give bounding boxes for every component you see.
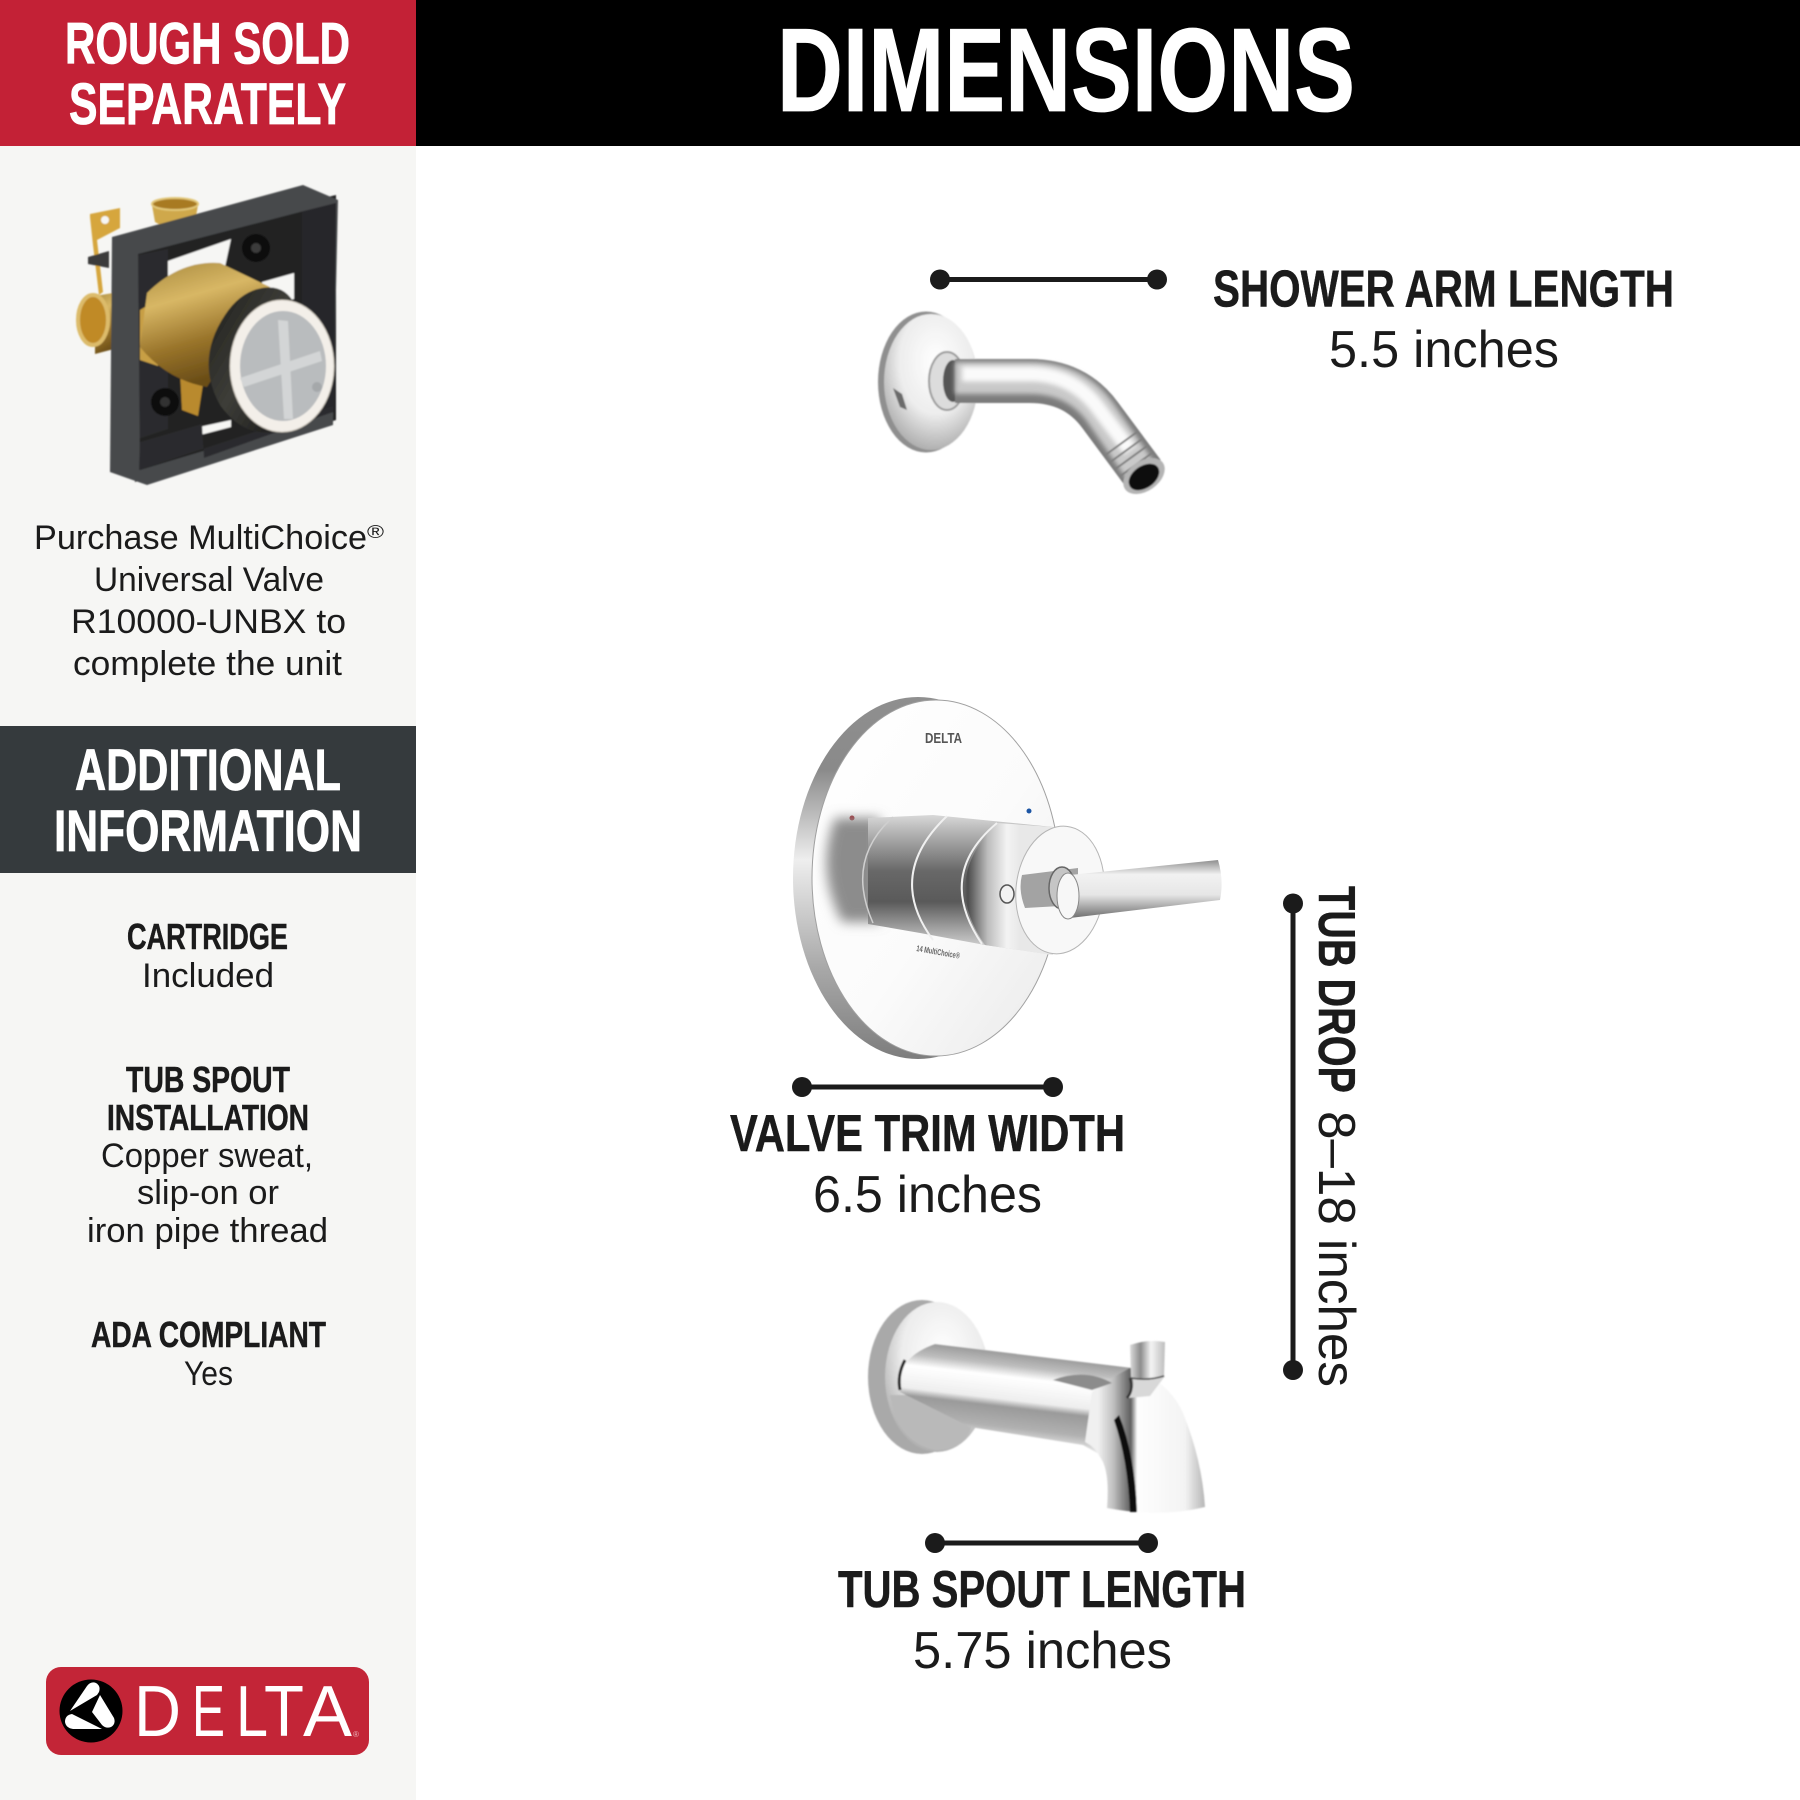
text block: tub spout length bbox=[838, 1561, 1246, 1680]
diverter neck bbox=[1128, 1376, 1165, 1398]
icon: rough-in valve bbox=[78, 185, 338, 485]
text block: valve trim width: 6.5 inches bbox=[813, 1166, 1042, 1224]
plastic cap cross bbox=[240, 320, 322, 419]
text block: tub spout installation bbox=[87, 1059, 328, 1250]
frame lower inner wall bbox=[139, 406, 333, 470]
panel: sidebar background bbox=[0, 146, 416, 1800]
text block: valve trim width bbox=[730, 1105, 1125, 1224]
lever bbox=[1070, 860, 1222, 918]
text block: ada compliant: ADA COMPLIANT bbox=[91, 1314, 326, 1355]
text block: tub drop: 8–18 inches bbox=[1307, 1111, 1365, 1387]
segment line 2 bbox=[912, 816, 947, 940]
front flange bbox=[885, 1302, 989, 1452]
multichoice mark: 14 MultiChoice® bbox=[916, 943, 961, 961]
top brass fitting bbox=[152, 200, 198, 258]
threaded outlet bbox=[180, 372, 204, 416]
threads bbox=[1104, 432, 1157, 484]
back flange bbox=[793, 697, 1043, 1059]
lever tip bbox=[1057, 873, 1079, 919]
last segment shading bbox=[965, 823, 1053, 955]
title: dimensions banner: DIMENSIONS bbox=[777, 4, 1355, 137]
icon: shower arm bbox=[878, 312, 1171, 501]
logo: delta: ® bbox=[353, 1730, 359, 1739]
cap nub bbox=[312, 382, 322, 392]
logo: delta: E bbox=[192, 1672, 225, 1752]
text block: cartridge bbox=[127, 916, 288, 995]
heading: additional information: INFORMATION bbox=[54, 799, 362, 864]
left inner wall bbox=[138, 249, 168, 439]
plastic cap bbox=[240, 311, 326, 421]
icon: tub spout bbox=[868, 1300, 1205, 1513]
text block: purchase note: ® bbox=[367, 522, 384, 542]
brass valve body bbox=[140, 263, 270, 387]
text block: purchase note: R10000-UNBX to bbox=[71, 603, 346, 641]
right window bbox=[262, 273, 294, 307]
panel: rough sold separately banner: SEPARATELY bbox=[69, 72, 346, 137]
text block: tub spout installation: iron pipe thread bbox=[87, 1212, 328, 1250]
text block: tub spout installation: TUB SPOUT bbox=[126, 1059, 290, 1100]
logo: delta bbox=[46, 1667, 369, 1755]
text block: ada compliant bbox=[91, 1314, 326, 1393]
logo: delta: A bbox=[303, 1672, 352, 1752]
inner dark back of frame bbox=[125, 195, 336, 482]
lever hub bbox=[1021, 868, 1078, 908]
spout pipe bbox=[899, 1344, 1135, 1460]
flange back bbox=[878, 312, 974, 452]
spout tip bbox=[1085, 1368, 1205, 1513]
tab clip bbox=[88, 251, 109, 268]
dark reflection stripe bbox=[1114, 1415, 1137, 1512]
flange face bbox=[884, 314, 978, 450]
text block: shower arm length bbox=[1213, 260, 1674, 379]
icon: valve trim bbox=[793, 697, 1222, 1059]
small button bbox=[1000, 885, 1014, 903]
title: dimensions banner bbox=[416, 0, 1800, 146]
pipe opening bbox=[1117, 451, 1171, 501]
text block: tub drop: TUB DROP bbox=[1307, 886, 1365, 1093]
end cap bbox=[1010, 822, 1110, 958]
diverter seam bbox=[1131, 1376, 1164, 1379]
text block: cartridge: Included bbox=[142, 957, 274, 995]
arrow: valve trim dimension line bbox=[792, 1077, 1063, 1097]
lower window bbox=[181, 420, 231, 440]
heading: additional information bbox=[0, 726, 416, 873]
arm mid tone bbox=[955, 378, 1140, 470]
text block: purchase note: complete the unit bbox=[73, 645, 343, 683]
segment line 3 bbox=[962, 823, 997, 944]
cartridge chrome ring bbox=[230, 300, 334, 432]
text block: ada compliant: Yes bbox=[184, 1355, 233, 1393]
text block: tub drop bbox=[1307, 886, 1365, 1387]
text block: tub spout installation: slip-on or bbox=[137, 1174, 279, 1212]
arrow: tub drop dimension line bbox=[1283, 894, 1303, 1380]
flange dark crease bbox=[899, 1360, 905, 1390]
text block: cartridge: CARTRIDGE bbox=[127, 916, 288, 957]
text block: tub spout length: 5.75 inches bbox=[913, 1622, 1172, 1680]
frame right inner wall bbox=[302, 203, 336, 420]
arrow: shower arm dimension line bbox=[930, 270, 1167, 290]
brass stem bump bbox=[140, 305, 158, 366]
panel: rough sold separately banner: ROUGH SOLD bbox=[65, 12, 350, 76]
arrow: tub spout dimension line bbox=[925, 1533, 1158, 1553]
text block: shower arm length: SHOWER ARM LENGTH bbox=[1213, 260, 1674, 318]
delta mark: DELTA bbox=[925, 730, 962, 747]
cold indicator bbox=[1026, 808, 1032, 814]
arm highlight bbox=[962, 374, 1130, 450]
text block: tub spout installation: INSTALLATION bbox=[107, 1097, 309, 1138]
upper window bbox=[165, 239, 231, 289]
text block: purchase note: Universal Valve bbox=[94, 561, 324, 599]
front plate bbox=[812, 700, 1060, 1056]
text block: tub spout installation: Copper sweat, bbox=[101, 1137, 313, 1175]
mounting tab bbox=[90, 208, 120, 295]
handle body bbox=[868, 815, 1053, 955]
panel: rough sold separately banner bbox=[0, 0, 416, 146]
diverter post bbox=[1130, 1341, 1165, 1379]
left brass fitting bbox=[78, 291, 125, 354]
frame bbox=[110, 185, 338, 485]
collar bbox=[929, 352, 965, 410]
cartridge dark ring bbox=[209, 287, 295, 432]
upper screw boss bbox=[242, 234, 270, 262]
logo: delta: T bbox=[264, 1672, 304, 1752]
text block: shower arm length: 5.5 inches bbox=[1329, 321, 1559, 379]
back flange bbox=[868, 1300, 976, 1454]
logo: delta: D bbox=[134, 1672, 181, 1752]
diverter slot bbox=[1053, 1375, 1112, 1390]
logo: delta: L bbox=[236, 1672, 268, 1752]
heading: additional information: ADDITIONAL bbox=[75, 738, 341, 803]
hot indicator bbox=[850, 816, 854, 820]
segment line 1 bbox=[863, 817, 893, 923]
arm outer edge bbox=[955, 381, 1143, 473]
handle base fade bbox=[826, 818, 880, 922]
flange lower shade bbox=[890, 1395, 972, 1450]
text block: valve trim width: VALVE TRIM WIDTH bbox=[730, 1105, 1125, 1163]
text block: purchase note bbox=[34, 519, 384, 683]
lower screw boss bbox=[151, 388, 179, 416]
text block: tub spout length: TUB SPOUT LENGTH bbox=[838, 1561, 1246, 1619]
text block: purchase note: Purchase MultiChoice bbox=[34, 519, 367, 557]
